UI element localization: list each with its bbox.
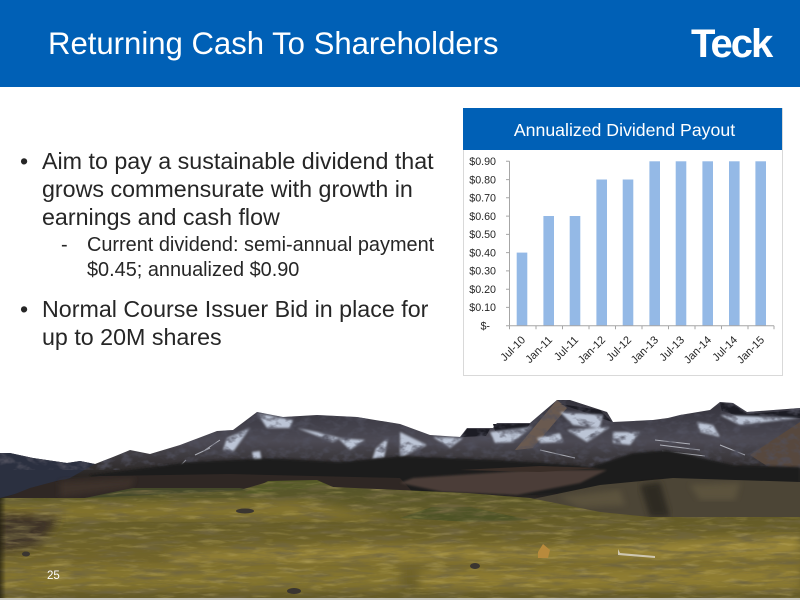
bullet: dividend: earnings and cash flow [42,204,280,230]
y axis labels: $0.60 [469,211,496,223]
bullet: issuer bid [20,296,428,350]
chart heading: Annualized Dividend Payout [514,120,735,140]
x axis labels: Jul-12 [604,334,634,364]
x axis labels: Jan-15 [735,334,767,366]
mid-ground bluffs [0,466,800,530]
x axis labels: Jan-13 [629,334,661,366]
y axis labels: $0.70 [469,192,496,204]
snow patches [223,412,800,462]
sub-bullet: current dividend: - [61,234,68,256]
page number: 25 [47,570,60,582]
x axis labels: Jul-14 [710,334,740,364]
dark ridge shadow [90,450,800,500]
bullet: dividend: Aim to pay a sustainable dividend that [42,148,434,174]
bullet: issuer bid: up to 20M shares [42,324,222,350]
bullet: dividend: grows commensurate with growth in [42,176,413,202]
logo: Teck: Teck [691,22,771,66]
y axis labels: $0.40 [469,247,496,259]
y axis labels [469,156,496,332]
x axis labels: Jul-10 [498,334,528,364]
x axis labels [498,334,767,366]
distant mountains [0,400,800,499]
y axis labels: $0.80 [469,174,496,186]
rock mottling [0,400,800,470]
y axis labels: $0.10 [469,302,496,314]
y axis labels: $0.50 [469,229,496,241]
x axis labels: Jul-13 [657,334,687,364]
y axis labels: $- [480,320,490,332]
sub-bullet: current dividend: $0.45; annualized $0.90 [87,259,299,281]
dark crags [461,403,800,437]
bullet text block [20,148,434,350]
bar chart [469,156,774,366]
bullet: dividend: • [20,148,28,174]
x axis labels: Jan-12 [576,334,608,366]
bullet: dividend [20,148,434,230]
header bar [0,0,800,87]
bullet: issuer bid: Normal Course Issuer Bid in place for [42,296,428,322]
title: Returning Cash To Shareholders [48,26,499,61]
landscape photo illustration [0,400,800,600]
axes [506,161,774,329]
y axis labels: $0.20 [469,284,496,296]
x axis labels: Jul-11 [552,334,581,363]
ridge streaks [178,440,745,468]
x axis labels: Jan-11 [523,334,555,366]
bars [517,161,766,326]
grass field [0,480,800,600]
rocks [22,508,480,594]
bullet: issuer bid: • [20,296,28,322]
y axis labels: $0.30 [469,266,496,278]
panel: dividend chart [463,108,783,376]
x axis labels: Jan-14 [682,334,714,366]
y axis labels: $0.90 [469,156,496,168]
chart heading [463,108,782,150]
sub-bullet: current dividend [61,234,434,281]
sub-bullet: current dividend: Current dividend: semi-annual payment [87,234,434,256]
